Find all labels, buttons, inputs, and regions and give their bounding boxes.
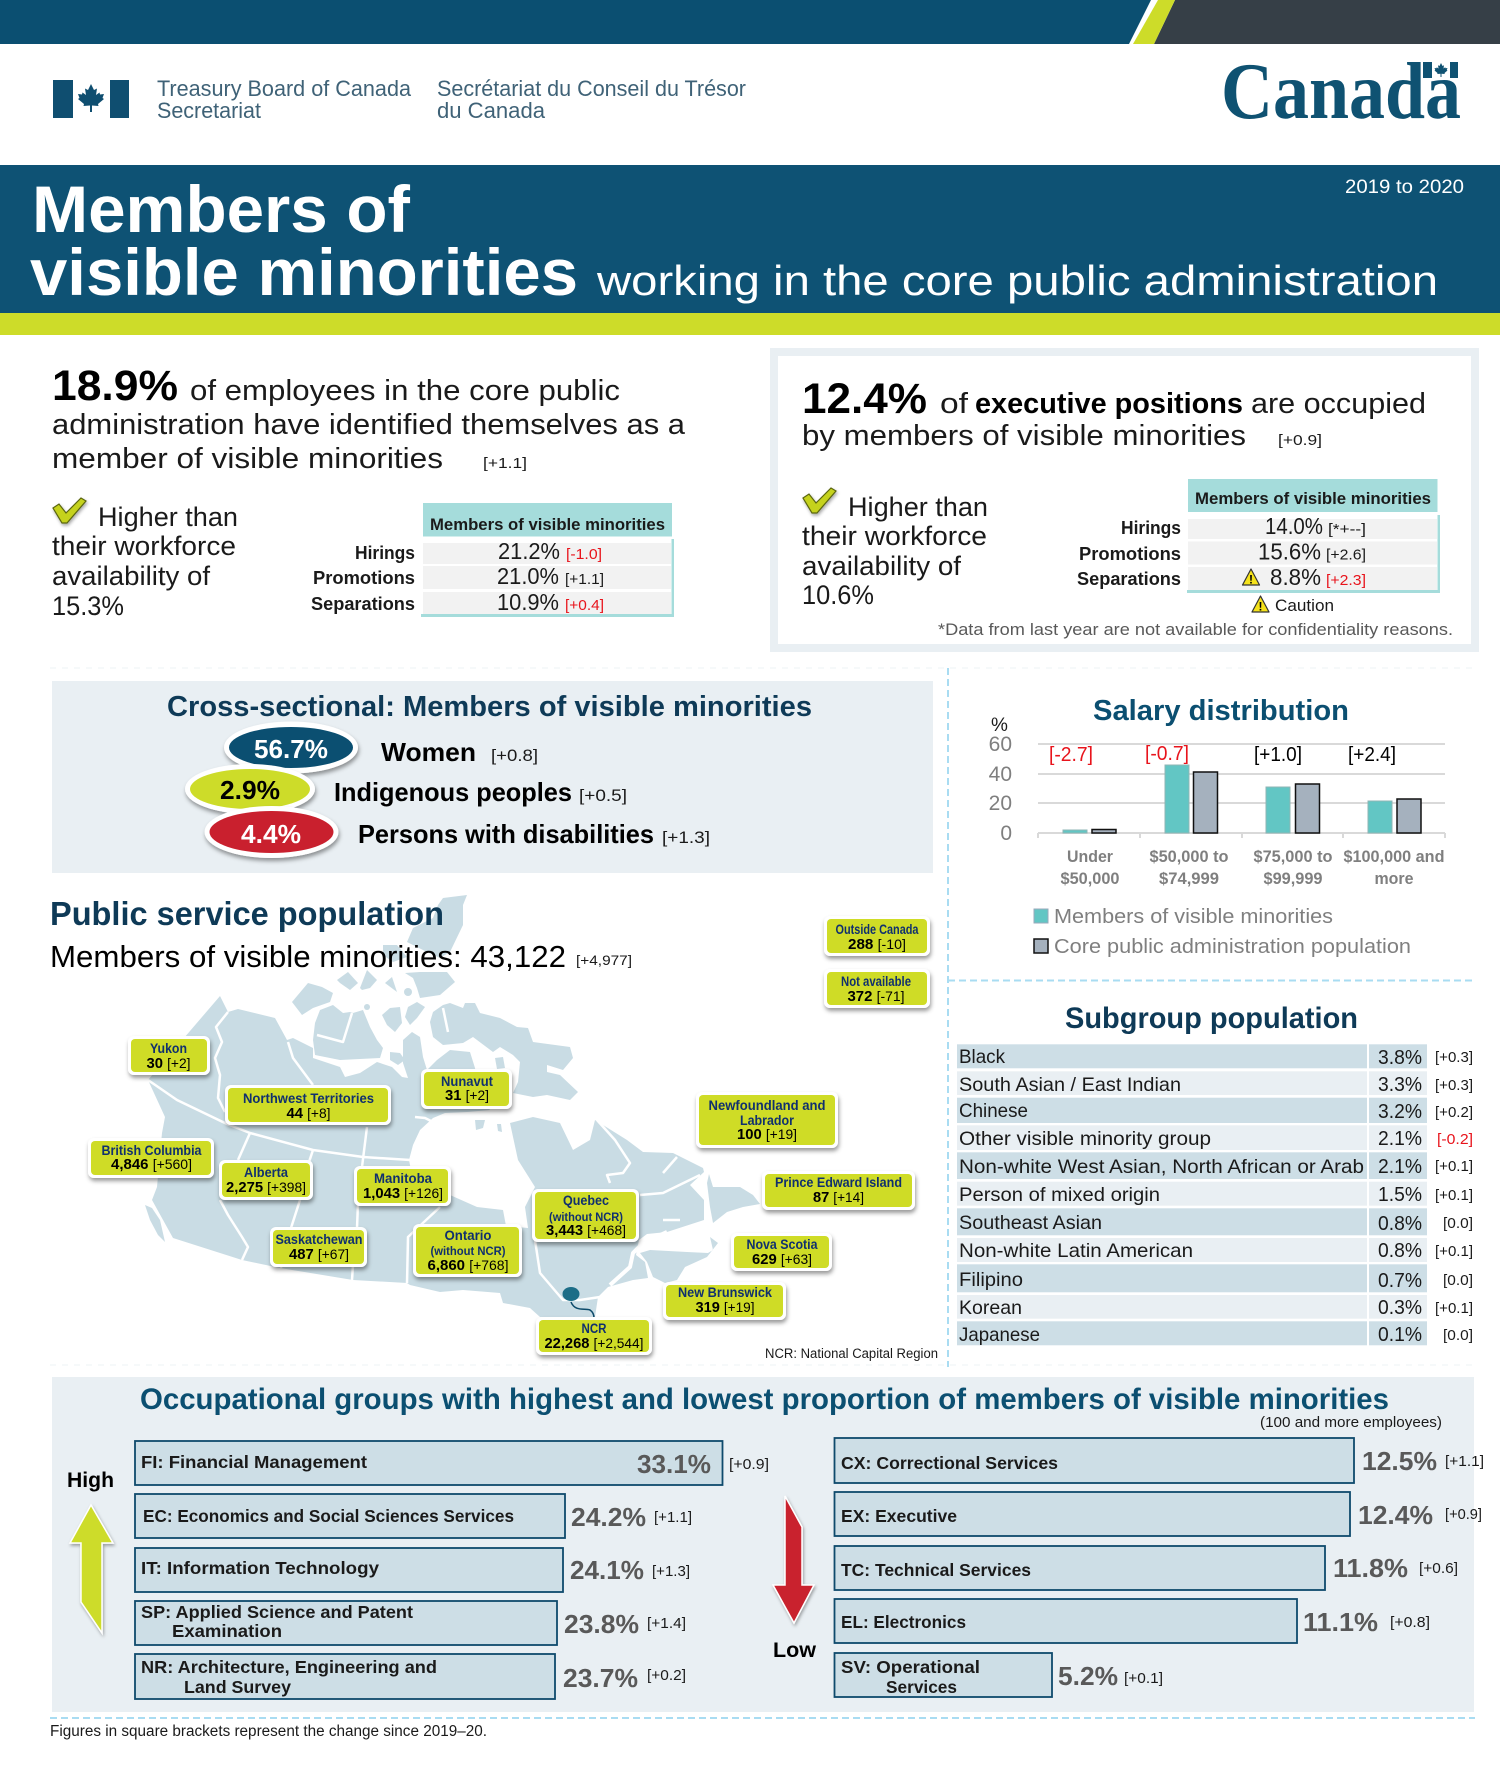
bubble: Indigenous peoples: [+0.5] (579, 786, 627, 805)
chart: salary distribution: 0 (1000, 822, 1012, 845)
label: Ontario: Ontario (444, 1228, 492, 1243)
bubble: Indigenous peoples: Indigenous peoples (334, 777, 572, 807)
chart: salary distribution: 40 (989, 763, 1012, 786)
table: subgroup population: Chinese (959, 1100, 1028, 1122)
table: employees staffing activities: 10.9% (497, 589, 559, 615)
text: executive workforce availability: Higher than (848, 492, 988, 522)
table: employees staffing activities: [+1.1] (565, 571, 604, 588)
chart: salary distribution: $75,000 to (1254, 848, 1332, 866)
label: Quebec: 3,443 [+468] (546, 1222, 626, 1239)
panel: employees headline (52, 362, 686, 475)
government signature: Treasury Board of Canada Secretariat: Treasury Board of Canada (157, 76, 412, 101)
bubble: women: 56.7% (254, 734, 328, 764)
table: subgroup population: 1.5% (1378, 1184, 1422, 1206)
label: Alberta: 2,275 [+398] (226, 1179, 306, 1196)
table: subgroup population: [+0.2] (1435, 1104, 1473, 1121)
panel: occupational groups (52, 1377, 1484, 1712)
chart: salary distribution: [+1.0] (1254, 744, 1302, 766)
text: workforce availability (52, 502, 238, 621)
government signature: Treasury Board of Canada Secretariat (53, 76, 746, 123)
title banner: Members of (32, 172, 411, 246)
title banner: working in the core public administration (596, 257, 1438, 304)
table: subgroup population: [0.0] (1443, 1272, 1473, 1289)
high bars: 24.2% (571, 1504, 646, 1532)
label: NCR: NCR (582, 1321, 607, 1336)
table: subgroup population: 3.8% (1378, 1047, 1422, 1069)
label: Yukon: Yukon (150, 1041, 187, 1056)
table: employees staffing activities: [+0.4] (565, 597, 604, 614)
table: executive staffing activities: Hirings (1121, 518, 1181, 538)
legend: caution: ! (1258, 600, 1262, 614)
label: Ontario: (without NCR) (430, 1246, 506, 1258)
text: workforce availability: Higher than (98, 502, 238, 532)
icon: check mark (53, 498, 86, 523)
panel: executive positions: 12.4% (802, 375, 927, 423)
label: Not available: 372 [-71] (848, 988, 904, 1005)
table: executive staffing activities: 14.0% (1265, 513, 1323, 539)
label: Nunavut: 31 [+2] (445, 1087, 489, 1104)
title banner: visible minorities (30, 235, 578, 309)
high label and arrow (67, 1469, 114, 1633)
text: executive workforce availability (802, 492, 988, 610)
bubble: women: [+0.8] (491, 746, 538, 765)
label: Manitoba (354, 1166, 451, 1206)
top bar (0, 0, 1500, 44)
label: Quebec: Quebec (563, 1193, 609, 1208)
chart: salary distribution: $74,999 (1159, 870, 1219, 888)
label: Nova Scotia (731, 1233, 832, 1271)
title banner (0, 165, 1500, 335)
high bars: Examination (172, 1621, 282, 1641)
label: Yukon: 30 [+2] (146, 1055, 190, 1072)
chart: salary distribution: $99,999 (1264, 870, 1322, 888)
label: Manitoba: Manitoba (374, 1171, 432, 1186)
table: employees staffing activities (311, 503, 674, 617)
low bars: [+0.6] (1419, 1560, 1458, 1577)
panel: executive positions: of (940, 388, 969, 420)
pin: National Capital Region (562, 1287, 594, 1318)
low label and arrow (773, 1496, 817, 1662)
high bars: Land Survey (184, 1677, 291, 1697)
table: subgroup population: [0.0] (1443, 1215, 1473, 1232)
heading: public service population: Members of visible minorities: 43,122 (50, 939, 566, 974)
bubble: persons with disabilities: [+1.3] (662, 828, 710, 847)
government signature: Treasury Board of Canada Secretariat: Secrétariat du Conseil du Trésor (437, 76, 746, 101)
table: subgroup population: South Asian / East Indian (959, 1074, 1181, 1096)
low bars: EL: Electronics (841, 1612, 966, 1632)
low bars: CX: Correctional Services (841, 1453, 1058, 1473)
chart legend (1034, 905, 1411, 958)
low label and arrow: Low (773, 1639, 817, 1662)
table: subgroup population: [+0.1] (1435, 1187, 1473, 1204)
table: employees staffing activities: Hirings (355, 543, 415, 563)
chart: salary distribution: $50,000 (1060, 870, 1120, 888)
table: executive staffing activities: Members of visible minorities (1195, 489, 1431, 508)
table: executive staffing activities: Promotions (1079, 544, 1181, 564)
low bars: [+1.1] (1445, 1453, 1484, 1470)
low bars: [+0.9] (1445, 1506, 1482, 1523)
map of Canada (145, 895, 760, 1318)
low bars: 11.8% (1333, 1555, 1408, 1583)
table: subgroup population: 0.1% (1378, 1324, 1422, 1346)
table: subgroup population: Non-white West Asian, North African or Arab (959, 1156, 1364, 1178)
label: Ontario (413, 1224, 522, 1277)
low bars: Services (886, 1677, 957, 1697)
panel: occupational groups: Occupational groups with highest and lowest proportion of members of visible minorities (140, 1383, 1389, 1416)
table: executive staffing activities: [+2.3] (1326, 572, 1366, 589)
table: subgroup population: Black (959, 1046, 1005, 1068)
table: subgroup population: [+0.1] (1435, 1300, 1473, 1317)
table: employees staffing activities: 21.2% (498, 538, 560, 564)
table: employees staffing activities: Promotions (313, 568, 415, 588)
table: executive staffing activities: 8.8% (1270, 564, 1321, 590)
panel: employees headline: administration have identified themselves as a (52, 409, 686, 441)
panel: employees headline: 18.9% (52, 362, 178, 410)
table: subgroup population: Subgroup population (1065, 1002, 1358, 1035)
table: employees staffing activities: [-1.0] (566, 546, 602, 563)
table: subgroup population: Korean (959, 1297, 1022, 1319)
label: New Brunswick (663, 1282, 786, 1320)
label: British Columbia (88, 1138, 214, 1178)
table: employees staffing activities: 21.0% (497, 563, 559, 589)
low bars: [+0.8] (1390, 1614, 1430, 1631)
label: Saskatchewan (270, 1227, 367, 1267)
table: executive staffing activities: [+2.6] (1326, 546, 1366, 564)
high label and arrow: High (67, 1469, 114, 1492)
table: subgroup population: 3.3% (1378, 1074, 1422, 1096)
high bars: 24.1% (570, 1557, 644, 1585)
high bars: FI: Financial Management (141, 1452, 367, 1472)
panel: executive positions: [+0.9] (1278, 432, 1322, 449)
chart: salary distribution: $50,000 to (1150, 848, 1228, 866)
high bars: [+1.4] (647, 1615, 686, 1632)
Canada wordmark: Canada (1221, 48, 1461, 136)
title banner: 2019 to 2020 (1345, 177, 1464, 198)
chart: salary distribution: 60 (989, 733, 1012, 756)
table: executive staffing activities: Separations (1077, 569, 1181, 589)
text: executive workforce availability: their workforce (802, 521, 987, 551)
table: employees staffing activities: Members of visible minorities (430, 515, 665, 534)
panel: executive positions: by members of visible minorities (802, 420, 1246, 452)
table: subgroup population: 2.1% (1378, 1156, 1422, 1178)
label: Alberta: Alberta (244, 1165, 288, 1180)
label: British Columbia: British Columbia (102, 1143, 202, 1158)
label: Outside Canada: Outside Canada (836, 922, 919, 937)
government signature: Treasury Board of Canada Secretariat: du Canada (437, 98, 546, 123)
low bars: EX: Executive (841, 1506, 957, 1526)
high bars: IT: Information Technology (141, 1558, 379, 1578)
label: Saskatchewan: 487 [+67] (289, 1246, 349, 1263)
table: subgroup population: Southeast Asian (959, 1212, 1102, 1234)
label: Newfoundland and Labrador: Labrador (740, 1113, 795, 1128)
label: New Brunswick: New Brunswick (678, 1285, 772, 1300)
table: subgroup population: Other visible minority group (959, 1128, 1211, 1150)
low bars: TC: Technical Services (841, 1560, 1031, 1580)
text: executive workforce availability: availability of (802, 551, 962, 581)
low bars: 11.1% (1303, 1609, 1378, 1637)
text: executive workforce availability: 10.6% (802, 580, 874, 610)
chart: salary distribution: % (991, 715, 1008, 736)
label: Yukon (128, 1036, 210, 1075)
chart: salary distribution: Salary distribution (1093, 695, 1349, 727)
panel: occupational groups: (100 and more employees) (1260, 1414, 1442, 1431)
table: subgroup population: [+0.1] (1435, 1243, 1473, 1260)
bubble: Indigenous peoples (185, 764, 627, 814)
table: subgroup population: 0.8% (1378, 1213, 1422, 1235)
table: subgroup population: [+0.3] (1435, 1077, 1473, 1094)
table: subgroup population: Filipino (959, 1269, 1023, 1291)
panel: employees headline: member of visible minorities (52, 443, 443, 475)
high bars (135, 1441, 769, 1699)
label: Not available (824, 969, 930, 1008)
footnote: confidentiality: *Data from last year are not available for confidentiality reasons. (938, 620, 1453, 639)
low bars: 5.2% (1058, 1663, 1118, 1691)
high bars: 23.7% (563, 1665, 638, 1693)
text: workforce availability: 15.3% (52, 591, 124, 621)
label: Nunavut (421, 1069, 512, 1109)
panel: executive positions: executive positions (975, 388, 1243, 420)
bubble: women (224, 722, 538, 774)
chart legend: Core public administration population (1054, 935, 1411, 958)
heading: public service population: Public service population (50, 895, 444, 932)
panel: cross-sectional (52, 681, 933, 873)
bubble: Indigenous peoples: 2.9% (220, 775, 280, 805)
bubble: women: Women (381, 737, 476, 767)
table: subgroup population (957, 1002, 1473, 1346)
chart: salary distribution: 20 (989, 792, 1012, 815)
label: Nova Scotia: Nova Scotia (746, 1237, 818, 1252)
high bars: [+1.1] (654, 1509, 692, 1526)
high bars: 33.1% (637, 1451, 711, 1479)
table: subgroup population: Non-white Latin American (959, 1240, 1193, 1262)
low bars: 12.5% (1362, 1448, 1437, 1476)
panel: executive positions (774, 352, 1475, 648)
low bars: SV: Operational (841, 1657, 980, 1677)
icon: check mark (803, 488, 836, 513)
low bars: [+0.1] (1124, 1670, 1163, 1687)
legend: caution: Caution (1275, 596, 1334, 615)
chart: salary distribution: [-0.7] (1145, 743, 1189, 765)
footnote: square brackets: Figures in square brackets represent the change since 2019–20. (50, 1723, 487, 1740)
label: Northwest Territories: 44 [+8] (286, 1105, 330, 1122)
label: Saskatchewan: Saskatchewan (276, 1232, 362, 1247)
text: workforce availability: availability of (52, 561, 211, 591)
table: subgroup population: [+0.1] (1435, 1158, 1473, 1175)
table: executive staffing activities (1077, 479, 1440, 593)
table: executive staffing activities: 15.6% (1258, 538, 1321, 564)
table: executive staffing activities: ! (1249, 572, 1253, 586)
panel: employees headline: of employees in the core public (190, 375, 620, 407)
label: Newfoundland and Labrador: Newfoundland and (708, 1098, 826, 1113)
label: Not available: Not available (841, 974, 911, 989)
table: subgroup population: [+0.3] (1435, 1049, 1473, 1066)
panel: cross-sectional: Cross-sectional: Members of visible minorities (167, 691, 812, 723)
low bars: 12.4% (1358, 1502, 1433, 1530)
label: British Columbia: 4,846 [+560] (111, 1156, 192, 1173)
table: subgroup population: Person of mixed origin (959, 1184, 1160, 1206)
chart: salary distribution: [+2.4] (1348, 744, 1396, 766)
label: NCR: 22,268 [+2,544] (544, 1335, 644, 1352)
high bars: 23.8% (564, 1611, 639, 1639)
label: Northwest Territories (225, 1085, 391, 1125)
label: Outside Canada: 288 [-10] (848, 936, 906, 953)
heading: public service population: [+4,977] (576, 952, 632, 968)
chart: salary distribution (989, 695, 1445, 958)
bubble: persons with disabilities: 4.4% (241, 819, 301, 849)
table: subgroup population: 0.7% (1378, 1270, 1422, 1292)
high bars: SP: Applied Science and Patent (141, 1602, 413, 1622)
high bars: [+0.2] (647, 1667, 686, 1684)
label: NCR (536, 1317, 652, 1355)
table: subgroup population: 2.1% (1378, 1128, 1422, 1150)
chart: salary distribution: $100,000 and (1344, 848, 1444, 866)
bubble: persons with disabilities (204, 806, 710, 858)
table: subgroup population: [0.0] (1443, 1327, 1473, 1344)
label: New Brunswick: 319 [+19] (696, 1299, 754, 1316)
low bars (834, 1438, 1484, 1697)
table: subgroup population: Japanese (959, 1324, 1040, 1346)
label: Northwest Territories: Northwest Territories (243, 1091, 374, 1106)
note: NCR definition: NCR: National Capital Region (765, 1346, 938, 1361)
table: employees staffing activities: Separations (311, 594, 415, 614)
panel: employees headline: [+1.1] (483, 455, 527, 472)
label: Quebec (532, 1189, 639, 1242)
label: Alberta (219, 1160, 313, 1200)
label: Nunavut: Nunavut (441, 1074, 493, 1089)
bubble: persons with disabilities: Persons with disabilities (358, 819, 654, 849)
label: Ontario: 6,860 [+768] (428, 1257, 508, 1274)
chart: salary distribution: [-2.7] (1049, 744, 1093, 766)
label: Manitoba: 1,043 [+126] (363, 1185, 443, 1202)
label: Newfoundland and Labrador: 100 [+19] (737, 1126, 797, 1143)
high bars: [+0.9] (729, 1456, 769, 1473)
chart legend: Members of visible minorities (1054, 905, 1333, 928)
chart: salary distribution: Under (1067, 848, 1114, 866)
table: subgroup population: 0.3% (1378, 1297, 1422, 1319)
chart: salary distribution: more (1374, 870, 1414, 888)
high bars: [+1.3] (652, 1563, 690, 1580)
table: subgroup population: 0.8% (1378, 1240, 1422, 1262)
table: subgroup population: [-0.2] (1437, 1131, 1473, 1148)
panel: executive positions: are occupied (1251, 388, 1426, 420)
high bars: EC: Economics and Social Sciences Services (143, 1506, 514, 1526)
text: workforce availability: their workforce (52, 531, 236, 561)
label: Prince Edward Island (762, 1171, 915, 1210)
label: Nova Scotia: 629 [+63] (752, 1251, 812, 1268)
heading: public service population (50, 895, 632, 974)
high bars: NR: Architecture, Engineering and (141, 1657, 437, 1677)
label: Newfoundland and Labrador (696, 1092, 838, 1148)
table: executive staffing activities: [*+--] (1328, 521, 1366, 538)
label: Quebec: (without NCR) (549, 1212, 623, 1224)
label: Prince Edward Island: 87 [+14] (813, 1189, 864, 1206)
label: Prince Edward Island: Prince Edward Island (775, 1175, 902, 1190)
table: subgroup population: 3.2% (1378, 1101, 1422, 1123)
label: Outside Canada (824, 916, 930, 956)
government signature: Treasury Board of Canada Secretariat: Secretariat (157, 98, 261, 123)
